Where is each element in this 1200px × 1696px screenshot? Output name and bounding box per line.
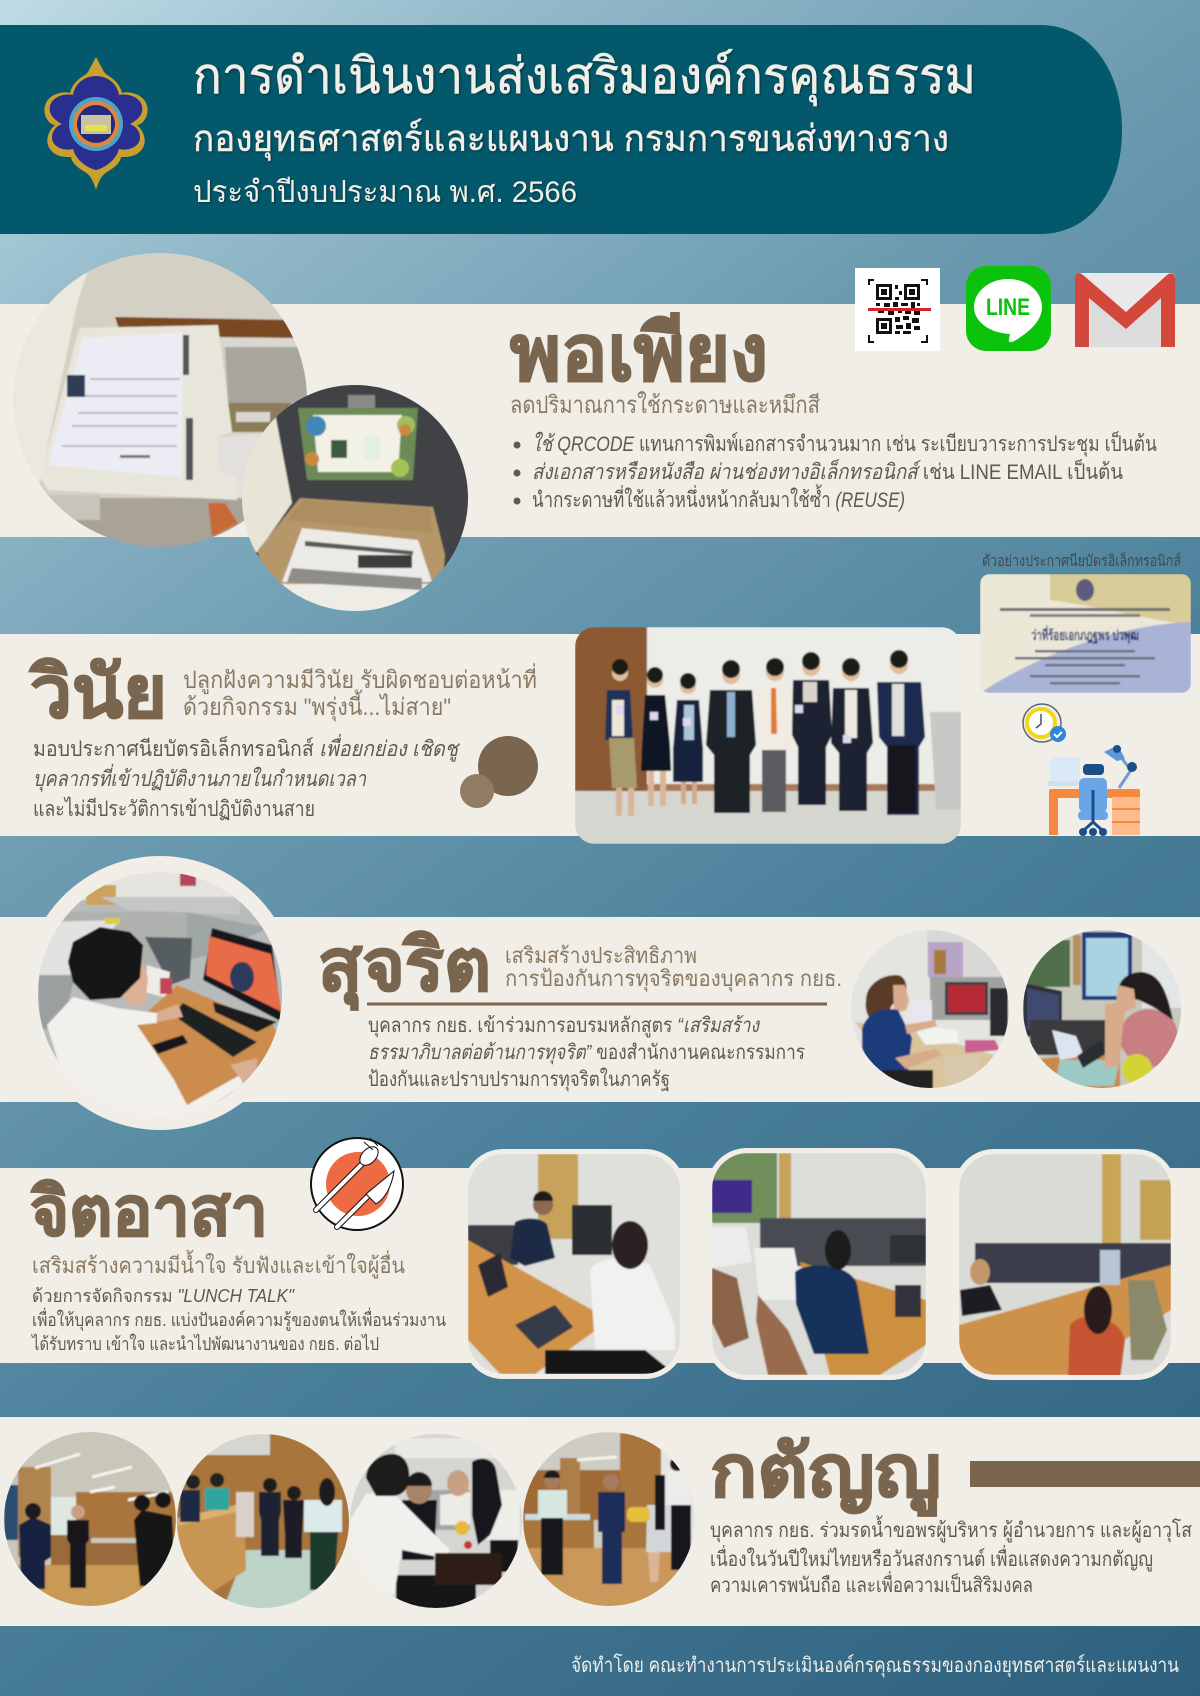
text block: จิตอาสา description: ได้รับทราบ เข้าใจ และนำไปพัฒนางานของ กยธ. ต่อไป xyxy=(30,1333,379,1354)
text block: กตัญญู description xyxy=(710,1515,1192,1597)
text block: จิตอาสา description: เพื่อให้บุคลากร กยธ. แบ่งปันองค์ความรู้ของตนให้เพื่อนร่วมงาน xyxy=(32,1307,446,1331)
photo: paper tray xyxy=(10,250,310,550)
text block: สุจริต description: ป้องกันและปราบปรามการทุจริตในภาครัฐ xyxy=(368,1067,670,1092)
panel: สุจริต band xyxy=(0,917,1200,1102)
subheading: วินัย xyxy=(183,663,537,722)
photo: person at computer with cream ring xyxy=(38,856,282,1130)
photo: Songkran 4 xyxy=(522,1432,698,1608)
photo: recycling box xyxy=(240,383,472,615)
subheading: สุจริต: เสริมสร้างประสิทธิภาพ xyxy=(505,943,697,968)
panel: กตัญญู band xyxy=(0,1417,1200,1626)
text block: วินัย description: และไม่มีประวัติการเข้าปฏิบัติงานสาย xyxy=(33,796,315,821)
photo: Songkran 2 xyxy=(175,1433,353,1611)
icon: clock xyxy=(1023,704,1066,742)
subheading: วินัย: ปลูกฝังความมีวินัย รับผิดชอบต่อหน้าที่ xyxy=(183,663,537,695)
panel: วินัย band xyxy=(0,634,1200,836)
text block: วินัย description: มอบประกาศนียบัตรอิเล็กทรอนิกส์ เพื่อยกย่อง เชิดชู xyxy=(33,733,460,762)
icon: LINE xyxy=(966,266,1051,351)
heading: กตัญญู: กตัญญู xyxy=(710,1432,941,1517)
heading: วินัย: วินัย xyxy=(28,653,167,733)
icon: department emblem xyxy=(44,57,148,190)
icon: plate and cutlery xyxy=(311,1138,403,1230)
panel: พอเพียง band xyxy=(0,304,1200,537)
photo: Songkran 3 xyxy=(348,1433,526,1611)
certificate image xyxy=(980,574,1191,693)
certificate image: ว่าที่ร้อยเอกภฎฐพร ปวพุฒ xyxy=(1031,625,1139,645)
text block: วินัย description: บุคลากรที่เข้าปฏิบัติงานภายในกำหนดเวลา xyxy=(33,763,367,792)
subheading: สุจริต xyxy=(505,943,842,992)
text block: วินัย description xyxy=(33,733,460,821)
text block: จิตอาสา description xyxy=(30,1286,446,1354)
decorative circles xyxy=(460,736,538,808)
title: การดำเนินงานส่งเสริมองค์กรคุณธรรม xyxy=(193,48,976,106)
photo: group with certificates xyxy=(575,627,961,844)
subheading: จิตอาสา: เสริมสร้างความมีน้ำใจ รับฟังและเข้าใจผู้อื่น xyxy=(32,1250,405,1279)
heading: พอเพียง: พอเพียง xyxy=(510,309,768,397)
subheading: วินัย: ด้วยกิจกรรม "พรุ่งนี้...ไม่สาย" xyxy=(183,689,451,722)
title: ประจำปีงบประมาณ พ.ศ. 2566 xyxy=(193,176,577,209)
icon: desk and chair xyxy=(1048,745,1140,836)
photo: woman in pink at desk xyxy=(1020,928,1185,1095)
text block: จิตอาสา description: ด้วยการจัดกิจกรรม "LUNCH TALK" xyxy=(32,1286,296,1306)
panel: header banner xyxy=(0,25,1122,234)
text block: กตัญญู description: ความเคารพนับถือ และเพื่อความเป็นสิริมงคล xyxy=(710,1571,1033,1597)
title xyxy=(193,48,976,209)
heading: จิตอาสา: จิตอาสา xyxy=(30,1174,268,1250)
decorative bar xyxy=(970,1461,1200,1487)
panel: จิตอาสา band xyxy=(0,1168,1200,1363)
icon: QR code xyxy=(855,268,940,351)
photo: lunch talk 3 xyxy=(954,1149,1176,1380)
icon: LINE: LINE xyxy=(986,294,1030,321)
bullet list: นำกระดาษที่ใช้แล้วหนึ่งหน้ากลับมาใช้ซ้ำ (REUSE) xyxy=(532,484,905,512)
photo: lunch talk 2 xyxy=(707,1148,931,1380)
icon: Gmail xyxy=(1075,273,1175,347)
bullet list: ส่งเอกสารหรือหนังสือ ผ่านช่องทางอิเล็กทรอนิกส์ เช่น LINE EMAIL เป็นต้น xyxy=(532,457,1123,484)
text block: สุจริต description xyxy=(368,1014,805,1092)
photo: lunch talk 1 xyxy=(463,1149,685,1379)
text block: สุจริต description: ธรรมาภิบาลต่อต้านการทุจริต” ของสำนักงานคณะกรรมการ xyxy=(368,1041,805,1065)
text block: สุจริต description: บุคลากร กยธ. เข้าร่วมการอบรมหลักสูตร “เสริมสร้าง xyxy=(368,1014,761,1038)
subheading: paper reduction: ลดปริมาณการใช้กระดาษและหมึกสี xyxy=(510,391,820,419)
bullet list xyxy=(514,429,1157,512)
photo: Songkran 1 xyxy=(0,1430,180,1610)
title: กองยุทธศาสตร์และแผนงาน กรมการขนส่งทางราง xyxy=(193,118,949,161)
photo: woman in navy at computer xyxy=(850,928,1012,1095)
subheading: สุจริต: การป้องกันการทุจริตของบุคลากร กยธ. xyxy=(505,966,842,992)
heading: สุจริต: สุจริต xyxy=(318,926,491,1011)
